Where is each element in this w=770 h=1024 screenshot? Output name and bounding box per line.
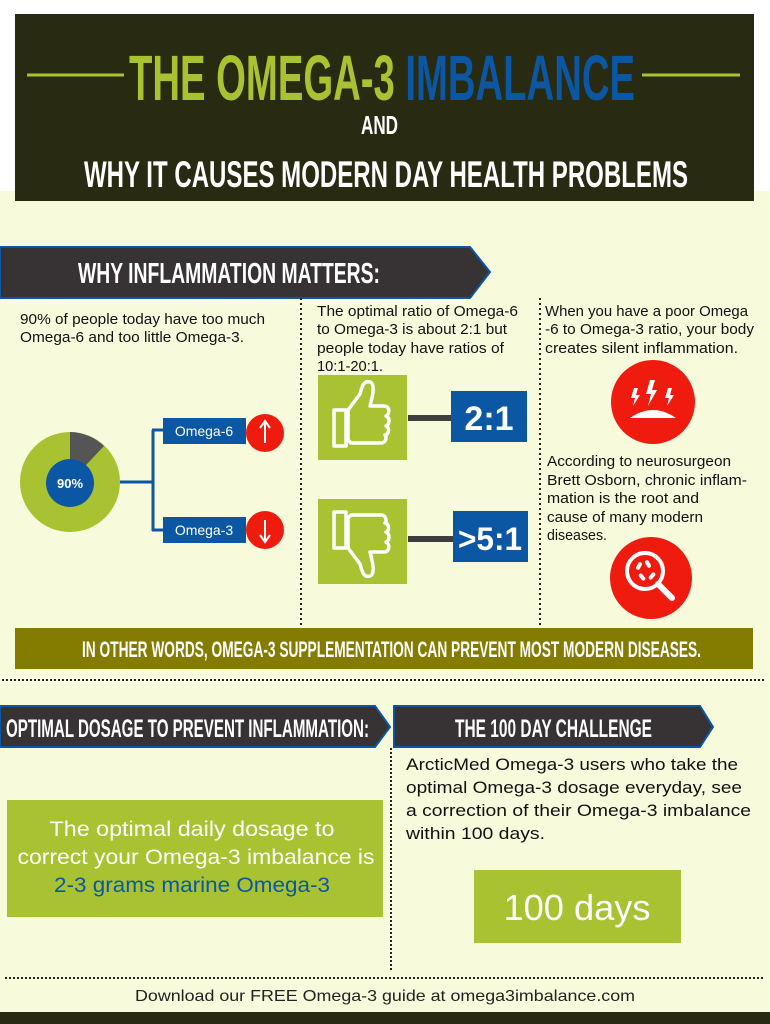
banner: 100 day challenge bbox=[394, 706, 713, 747]
text: optimal ratio: The optimal ratio of Omega-6 bbox=[317, 303, 518, 320]
ratio box 2:1 bbox=[451, 391, 527, 442]
text: silent inflammation: -6 to Omega-3 ratio, your body bbox=[545, 321, 755, 338]
banner: optimal dosage: OPTIMAL DOSAGE TO PREVENT INFLAMMATION: bbox=[6, 715, 369, 743]
donut chart 90% bbox=[20, 432, 120, 532]
subtitle and: AND bbox=[361, 110, 398, 140]
title: THE OMEGA-3 IMBALANCE bbox=[129, 42, 635, 114]
label: Omega-3 down: Omega-3 bbox=[175, 522, 233, 538]
text: optimal ratio: 10:1-20:1. bbox=[317, 358, 383, 375]
badge: 100 days: 100 days bbox=[504, 887, 650, 928]
label: Omega-6 up bbox=[163, 414, 284, 452]
text: neurosurgeon quote: Brett Osborn, chronic inflam- bbox=[547, 472, 747, 489]
text: neurosurgeon quote bbox=[547, 453, 747, 544]
label: Omega-6 up: Omega-6 bbox=[175, 423, 233, 439]
banner: why inflammation matters bbox=[0, 247, 490, 298]
text: 100 day challenge: within 100 days. bbox=[405, 824, 545, 843]
icon: magnifier bacteria bbox=[610, 537, 692, 619]
text: optimal ratio: to Omega-3 is about 2:1 but bbox=[317, 321, 508, 338]
banner: optimal dosage bbox=[0, 706, 390, 747]
dosage box: 2-3 grams marine Omega-3 bbox=[54, 874, 330, 897]
icon: thumbs down bbox=[318, 499, 407, 584]
icon: thumbs up bbox=[318, 375, 407, 460]
text: optimal ratio bbox=[317, 303, 518, 375]
text: 100 day challenge: a correction of their Omega-3 imbalance bbox=[406, 801, 751, 820]
callout bar: in other words bbox=[15, 628, 753, 669]
text: 100 day challenge: ArcticMed Omega-3 users who take the bbox=[406, 755, 738, 774]
text: 100 day challenge bbox=[405, 755, 751, 843]
connector lines bbox=[120, 430, 163, 531]
text: neurosurgeon quote: cause of many modern bbox=[547, 509, 703, 526]
text: optimal ratio: people today have ratios of bbox=[317, 340, 505, 357]
text: neurosurgeon quote: mation is the root and bbox=[547, 490, 699, 507]
ratio box >5:1: >5:1 bbox=[458, 521, 522, 557]
donut chart 90%: 90% bbox=[57, 476, 83, 491]
text: silent inflammation: When you have a poor Omega bbox=[545, 303, 749, 320]
dosage box: correct your Omega-3 imbalance is bbox=[18, 846, 374, 869]
ratio box >5:1 bbox=[453, 511, 528, 562]
header panel bbox=[15, 14, 754, 201]
text: neurosurgeon quote: According to neurosurgeon bbox=[547, 453, 731, 470]
dosage box bbox=[7, 800, 383, 917]
badge: 100 days bbox=[474, 870, 681, 943]
banner: 100 day challenge: THE 100 DAY CHALLENGE bbox=[455, 715, 652, 743]
text: 90% of people: 90% of people today have too much bbox=[20, 311, 265, 328]
text: 90% of people: Omega-6 and too little Omega-3. bbox=[20, 329, 244, 346]
banner: why inflammation matters: WHY INFLAMMATION MATTERS: bbox=[78, 258, 380, 290]
text: 90% of people bbox=[20, 311, 265, 346]
label: Omega-3 down bbox=[163, 511, 284, 549]
text: 100 day challenge: optimal Omega-3 dosage everyday, see bbox=[406, 778, 742, 797]
ratio box 2:1: 2:1 bbox=[464, 400, 514, 438]
footer text: Download our FREE Omega-3 guide at omega3imbalance.com bbox=[135, 988, 635, 1005]
dosage box: The optimal daily dosage to bbox=[50, 818, 334, 841]
text: silent inflammation: creates silent inflammation. bbox=[545, 340, 738, 357]
icon: inflammation bbox=[611, 360, 695, 444]
text: neurosurgeon quote: diseases. bbox=[547, 527, 607, 544]
text: silent inflammation bbox=[545, 303, 755, 357]
